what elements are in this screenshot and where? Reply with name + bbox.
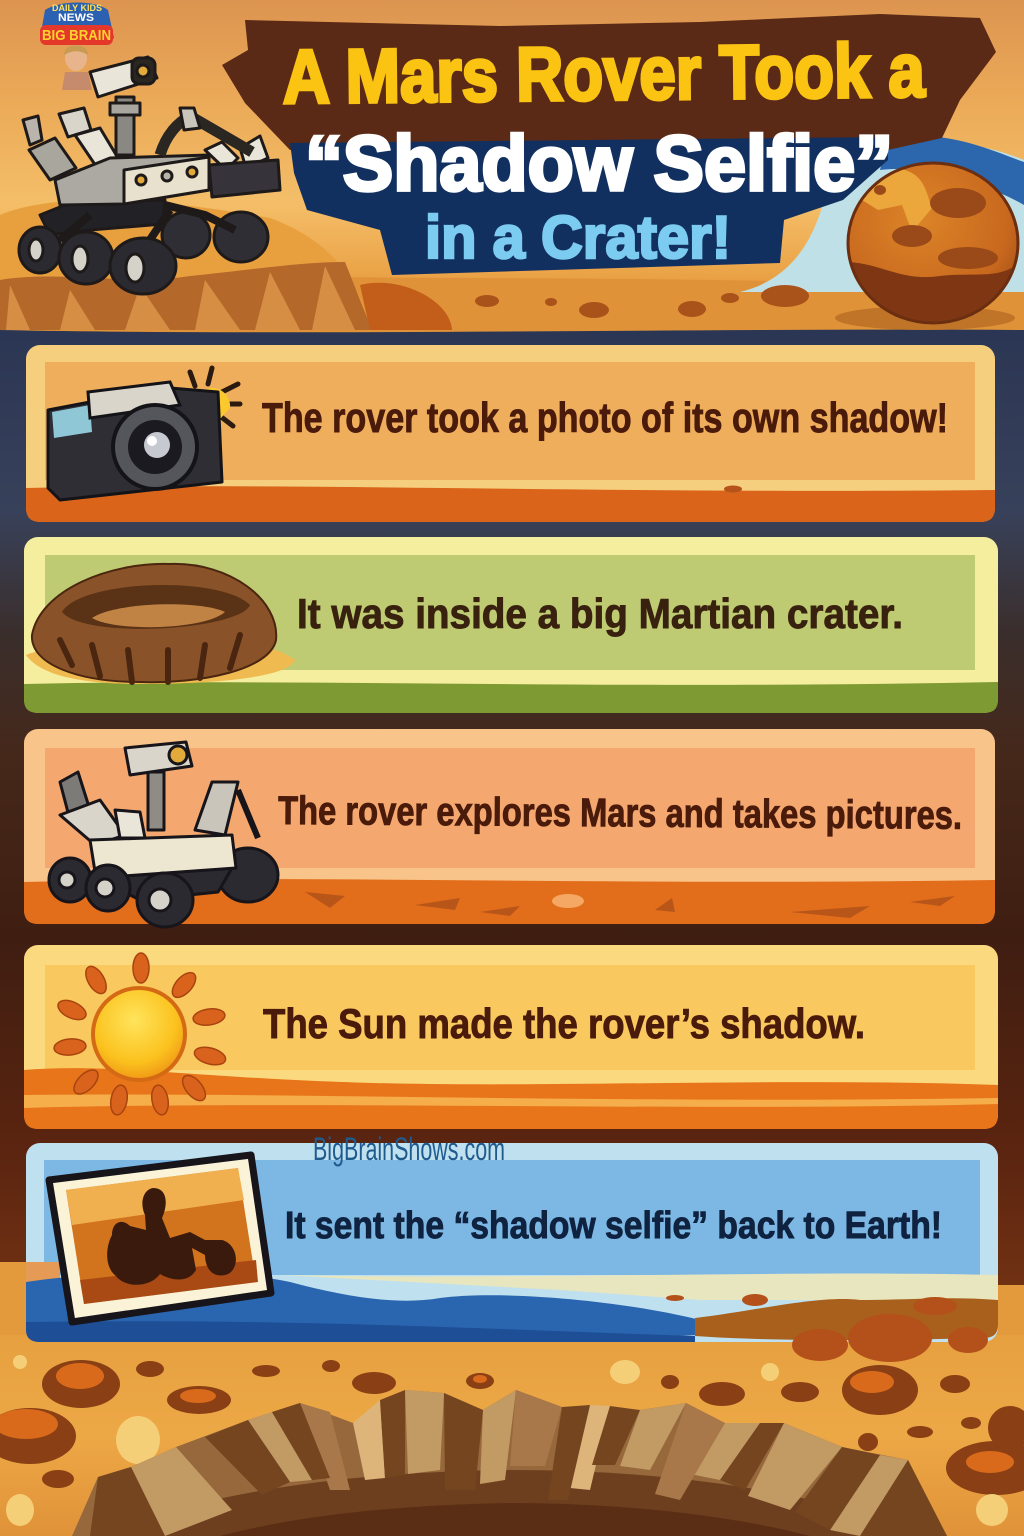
horizon water band: [740, 136, 1024, 292]
rover mast: [116, 97, 134, 155]
camera body: [48, 388, 222, 500]
watermark: BigBrainShows.com: [313, 1131, 505, 1167]
panel 4: sun: [24, 945, 998, 1129]
title line 3: in a Crater!: [425, 204, 731, 271]
rover camera head: [90, 57, 157, 97]
rover rear box: [209, 160, 280, 197]
icon: camera with sun: [48, 368, 240, 500]
panel 2: crater: [24, 537, 998, 713]
rover rear wheels: [162, 212, 210, 258]
rover front wheels: [19, 227, 61, 273]
banner: navy lower: [290, 137, 888, 275]
icon: main Mars rover: [19, 57, 280, 294]
logo: Daily Kids News with Big Brain: BIG BRAIN: [42, 27, 111, 44]
ground rocks near horizon: [475, 285, 809, 318]
banner: brown top: [222, 14, 996, 150]
logo: Daily Kids News with Big Brain: [40, 2, 114, 90]
panel 5 text: It sent the “shadow selfie” back to Earth!: [285, 1205, 942, 1247]
panel 2 text: It was inside a big Martian crater.: [297, 590, 903, 637]
rover chassis: [40, 200, 165, 235]
icon: planet Mars: [835, 163, 1020, 330]
rover arm: [160, 116, 252, 155]
crater hill under rover: [0, 200, 452, 330]
icon: small rover: [49, 742, 278, 927]
icon: sun: [53, 953, 228, 1116]
logo: Daily Kids News with Big Brain: DAILY KIDS: [52, 3, 102, 13]
sun rays: [190, 368, 240, 426]
title line 2: “Shadow Selfie”: [305, 119, 893, 207]
rover shadow: [107, 1188, 236, 1285]
title banner: [222, 14, 996, 275]
panel 1: shadow photo: [26, 345, 995, 522]
icon: big brain kid: [62, 45, 92, 90]
foreground rocks: [0, 1355, 1024, 1526]
icon: shadow selfie photo: [49, 1155, 271, 1322]
logo: Daily Kids News with Big Brain: NEWS: [58, 12, 94, 24]
icon: crater: [26, 564, 295, 684]
rover body: [55, 155, 209, 205]
panel 5: back to Earth: [26, 1143, 998, 1362]
panel 4 text: The Sun made the rover’s shadow.: [263, 1000, 865, 1047]
panel 3: rover explores: [24, 729, 995, 927]
title line 1: A Mars Rover Took a: [282, 28, 926, 120]
rover solar panels: [23, 116, 42, 145]
bottom crater: [72, 1390, 947, 1536]
